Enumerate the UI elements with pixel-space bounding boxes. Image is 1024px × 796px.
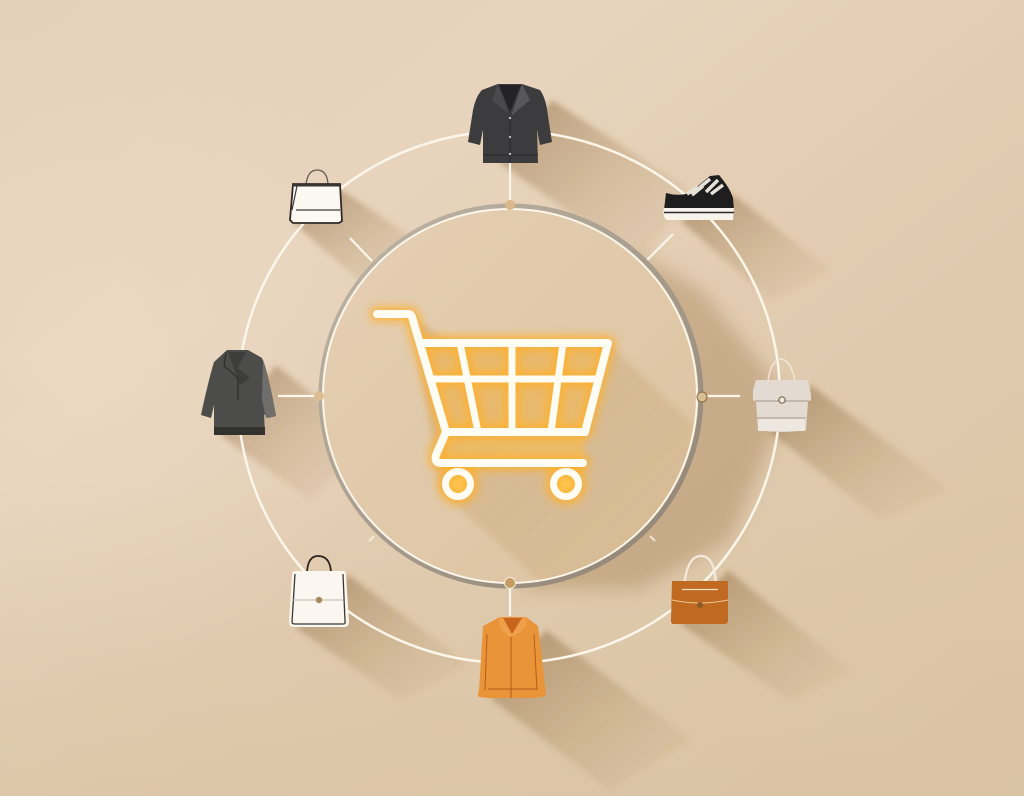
cart lines bbox=[377, 314, 608, 496]
central disc bbox=[321, 206, 710, 600]
spokes bbox=[278, 163, 740, 616]
item: right light bag bbox=[753, 359, 811, 432]
item: top-left white bag bbox=[290, 170, 342, 223]
item: bottom-left white bag bbox=[289, 556, 349, 627]
outer ring bbox=[238, 131, 780, 663]
connector nodes bbox=[314, 200, 707, 588]
item: left grey jacket bbox=[201, 350, 276, 435]
shopping cart icon bbox=[377, 314, 608, 497]
item shadows bbox=[220, 100, 950, 790]
item: bottom-right brown bag bbox=[671, 556, 728, 624]
cart pane tint bbox=[424, 345, 606, 432]
cart shadow bbox=[418, 322, 694, 580]
long shadow of central disc bbox=[520, 255, 790, 590]
item: top dark jacket bbox=[468, 84, 552, 163]
cart glow bbox=[377, 314, 608, 497]
item: bottom orange jacket bbox=[478, 617, 546, 698]
item: sneaker bbox=[663, 175, 734, 220]
